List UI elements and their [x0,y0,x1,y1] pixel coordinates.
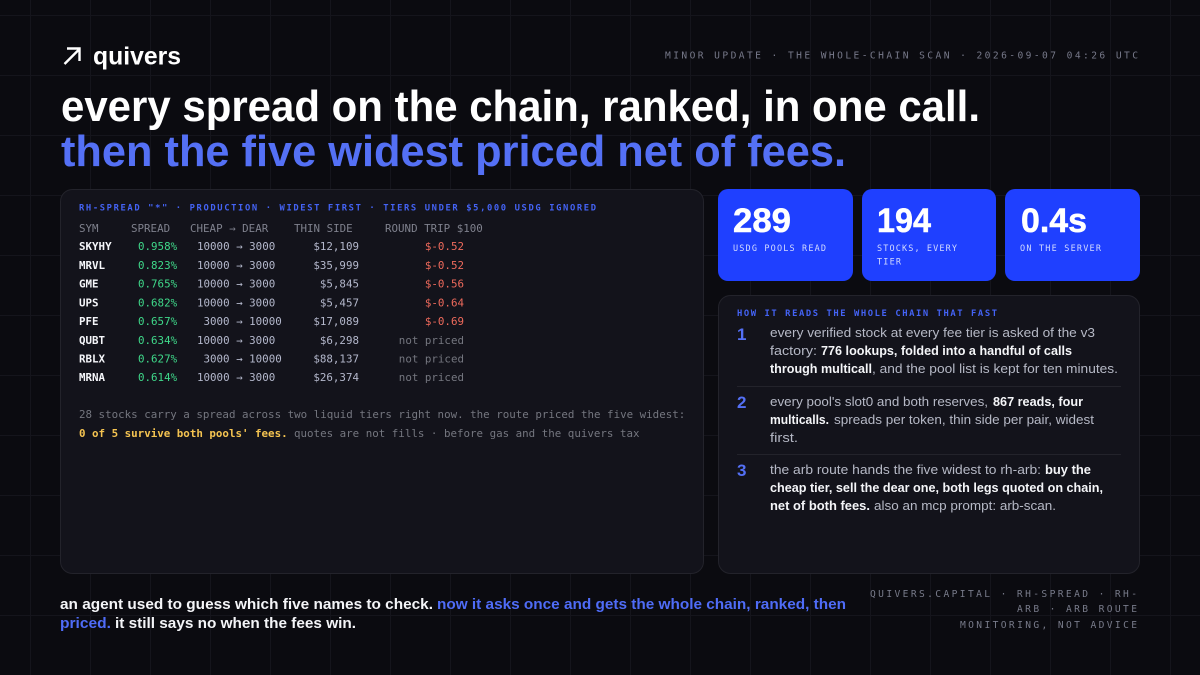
table: row PFE: PFE [79,315,99,328]
table: row QUBT: not priced [399,334,464,347]
footer credits [870,589,1137,631]
step 1: through multicall [770,362,872,376]
step 2 [737,393,1095,445]
table: header row: SPREAD [131,222,170,235]
table: row MRNA [79,371,464,384]
panel heading: HOW IT READS THE WHOLE CHAIN THAT FAST [737,309,997,319]
table: row MRNA: not priced [399,371,464,384]
table: row MRVL: 0.823% [138,259,178,272]
footer credits: MONITORING, NOT ADVICE [960,620,1137,631]
table: row UPS: 10000 → 3000 [197,296,275,310]
table: row GME [79,278,464,290]
step 1: factory: [770,344,817,358]
step 1: every verified stock at every fee tier is asked of the v3 [770,326,1095,340]
step 3: also an mcp prompt: arb-scan. [874,499,1056,513]
table: row MRNA: $26,374 [313,371,359,384]
table: row MRNA: 0.614% [138,371,178,384]
table: row MRNA: MRNA [79,371,106,384]
table: row MRNA: 10000 → 3000 [197,371,275,384]
step 1: , and the pool list is kept for ten minutes. [872,362,1118,376]
panel: spread table [60,190,704,574]
table: row RBLX: $88,137 [313,352,359,366]
step 2: first. [770,431,798,445]
table: row UPS: $-0.64 [425,296,464,310]
stat card: stocks, every tier [862,189,996,281]
step 3 [737,461,1103,513]
table: row SKYHY [79,240,464,253]
step 2: 2 [737,393,746,412]
table: header row: CHEAP → DEAR [190,222,269,235]
title: every spread on the chain, ranked, in one call. [61,82,980,131]
footer statement [60,596,846,632]
panel heading: RH-SPREAD "*" · PRODUCTION · WIDEST FIRST · TIERS UNDER $5,000 USDG IGNORED [79,204,596,214]
table summary note: 28 stocks carry a spread across two liquid tiers right now. the route priced the five widest: [79,408,685,421]
update timestamp: MINOR UPDATE · THE WHOLE-CHAIN SCAN · 2026-09-07 04:26 UTC [665,50,1138,62]
logo: quivers: quivers [93,42,181,70]
table: row QUBT [79,334,464,347]
footer statement: priced. [60,615,111,632]
stat card: usdg pools read [718,189,853,281]
table: header row [79,222,483,235]
table: row QUBT: 0.634% [138,334,178,347]
table: row MRVL: 10000 → 3000 [197,259,275,272]
stat card: on the server: ON THE SERVER [1020,244,1102,254]
table: row GME: $-0.56 [425,278,464,290]
table: header row: SYM [79,222,99,235]
step 3: the arb route hands the five widest to rh-arb: [770,463,1041,477]
table: row MRVL: MRVL [79,259,106,272]
footer statement: it still says no when the fees win. [115,615,356,632]
table: row QUBT: 10000 → 3000 [197,334,275,347]
table: row PFE [79,315,464,328]
table: row UPS: $5,457 [320,296,359,310]
footer statement: an agent used to guess which five names to check. [60,596,433,613]
title: then the five widest priced net of fees. [61,127,846,176]
footer statement: now it asks once and gets the whole chain, ranked, then [437,596,846,613]
table: row PFE: 3000 → 10000 [204,315,282,328]
table: row QUBT: QUBT [79,334,106,347]
table: row UPS: UPS [79,296,99,310]
stat card: on the server: 0.4s [1021,202,1087,240]
table: row SKYHY: $-0.52 [425,240,464,253]
step 3: net of both fees. [770,499,870,513]
step 2: 867 reads, four [993,395,1083,409]
table: row GME: 0.765% [138,278,178,290]
table summary note: quotes are not fills · before gas and the quivers tax [294,427,640,440]
table: row QUBT: $6,298 [320,334,359,347]
step 3: buy the [1045,463,1091,477]
table: row GME: $5,845 [320,278,359,290]
step 3: 3 [737,461,746,480]
table: row UPS: 0.682% [138,296,178,310]
stat card: usdg pools read: USDG POOLS READ [733,244,826,254]
step 3: cheap tier, sell the dear one, both legs quoted on chain, [770,481,1103,495]
table: row RBLX: RBLX [79,352,106,366]
table: row MRVL: $-0.52 [425,259,464,272]
title [61,82,980,176]
table: row MRVL [79,259,464,272]
step 2: every pool's slot0 and both reserves, [770,395,988,409]
panel: how it reads the chain [718,296,1140,574]
icon: up-right arrow [64,48,80,64]
table: row RBLX: 3000 → 10000 [204,352,282,366]
table: header row: ROUND TRIP $100 [385,222,483,235]
table: row PFE: $17,089 [313,315,359,328]
table: row PFE: 0.657% [138,315,178,328]
step 2: multicalls. [770,413,829,427]
table: row RBLX [79,352,464,366]
stat card: stocks, every tier: STOCKS, EVERY [877,244,957,254]
table: row SKYHY: 10000 → 3000 [197,240,275,253]
table: header row: THIN SIDE [294,222,353,235]
table: row RBLX: 0.627% [138,352,178,366]
table: row SKYHY: SKYHY [79,240,112,253]
table: row UPS [79,296,464,310]
stat card: stocks, every tier: TIER [877,258,902,268]
stat card: stocks, every tier: 194 [877,202,931,240]
footer credits: ARB · ARB ROUTE [1017,604,1137,615]
step 1: 776 lookups, folded into a handful of calls [821,344,1072,358]
footer credits: QUIVERS.CAPITAL · RH-SPREAD · RH- [870,589,1137,600]
table: row GME: 10000 → 3000 [197,278,275,290]
step 1 [737,325,1118,376]
table summary note: 0 of 5 survive both pools' fees. [79,427,288,440]
stat card: on the server [1005,189,1140,281]
step 2: spreads per token, thin side per pair, widest [834,413,1095,427]
table: row SKYHY: $12,109 [313,240,359,253]
step 1: 1 [737,325,746,344]
table: row SKYHY: 0.958% [138,240,178,253]
table summary note [79,408,685,440]
table: row GME: GME [79,278,99,290]
table: row RBLX: not priced [399,352,464,366]
stat card: usdg pools read: 289 [733,202,791,240]
table: row MRVL: $35,999 [313,259,359,272]
table: row PFE: $-0.69 [425,315,464,328]
